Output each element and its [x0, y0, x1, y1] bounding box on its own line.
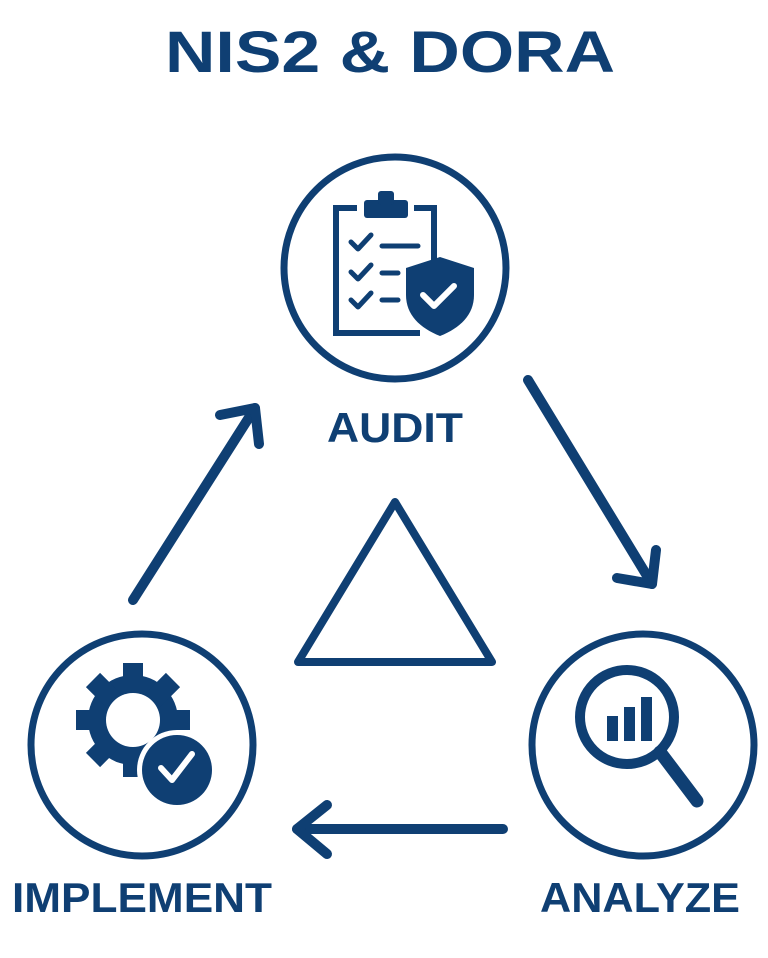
icon: clipboard with shield: [336, 191, 474, 336]
title: NIS2 & DORA: [165, 20, 615, 85]
center triangle: [298, 502, 492, 662]
text: IMPLEMENT: IMPLEMENT: [12, 874, 272, 921]
text: AUDIT: AUDIT: [327, 404, 463, 451]
arrow: audit to analyze: [528, 380, 656, 584]
text: ANALYZE: ANALYZE: [540, 874, 740, 921]
icon: magnifier with bars: [580, 670, 697, 801]
panel: audit: [284, 157, 506, 379]
panel: analyze: [532, 634, 754, 856]
icon: gear with check: [76, 663, 217, 810]
arrow: analyze to implement: [297, 805, 503, 854]
panel: implement: [31, 634, 253, 856]
arrow: implement to audit: [133, 408, 259, 600]
